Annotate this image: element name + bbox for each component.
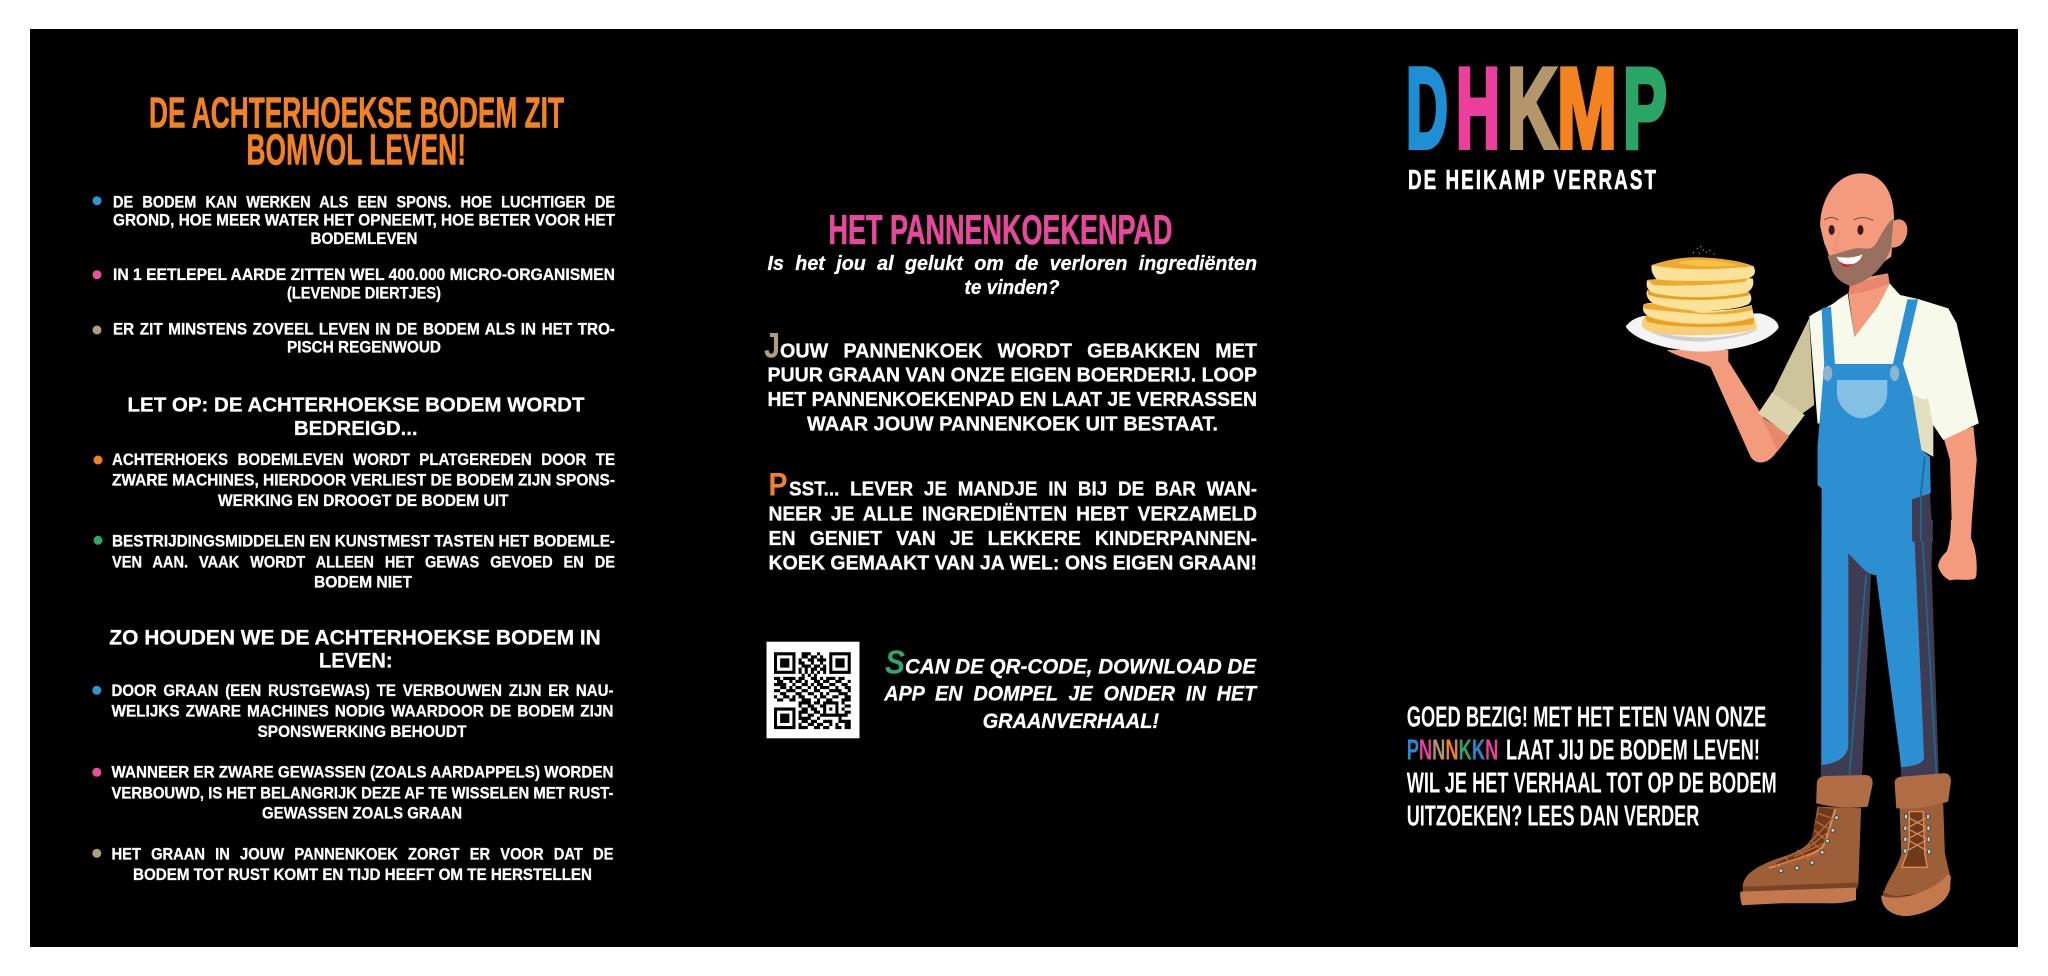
bullet list: threats — [94, 450, 615, 592]
heading: let op: LET OP: DE ACHTERHOEKSE BODEM WORDT — [128, 394, 585, 417]
paragraph: jouw pannenkoek — [764, 326, 1257, 436]
bullet list: threats: BODEM NIET — [314, 573, 413, 592]
ear — [1891, 219, 1907, 248]
neck — [1848, 273, 1890, 337]
heading: let op — [128, 394, 585, 440]
pocket — [1837, 380, 1887, 418]
bullet list: solutions: WELIJKS ZWARE MACHINES NODIG WAARDOOR DE BODEM ZIJN — [112, 701, 614, 720]
shirt — [1809, 283, 1979, 457]
left arm — [1710, 362, 1789, 463]
pancake stack — [1642, 315, 1757, 335]
bullet list: threats: VEN AAN. VAAK WORDT ALLEEN HET GEWAS GEVOED EN DE — [112, 552, 615, 571]
text: scan de qr-code: APP EN DOMPEL JE ONDER IN HET — [883, 682, 1258, 706]
paragraph: jouw pannenkoek: J — [764, 326, 780, 366]
left boot — [1740, 775, 1873, 905]
paragraph: psst: EN GENIET VAN JE LEKKERE KINDERPANNEN- — [768, 527, 1257, 550]
bullet list: solutions: BODEM TOT RUST KOMT EN TIJD HEEFT OM TE HERSTELLEN — [133, 865, 592, 884]
bullet list: facts about soil: IN 1 EETLEPEL AARDE ZITTEN WEL 400.000 MICRO-ORGANISMEN — [113, 266, 615, 284]
bullet list: solutions: VERBOUWD, IS HET BELANGRIJK DEZE AF TE WISSELEN MET RUST- — [112, 783, 614, 802]
plate with pancakes — [1626, 246, 1779, 373]
paragraph: jouw pannenkoek: PUUR GRAAN VAN ONZE EIGEN BOERDERIJ. LOOP — [768, 364, 1257, 387]
text: scan de qr-code: CAN DE QR-CODE, DOWNLOAD DE — [905, 654, 1257, 678]
right arm upper — [1943, 427, 1977, 542]
blue overall legs — [1821, 520, 1924, 767]
text: scan de qr-code: S — [885, 643, 905, 680]
title: de achterhoekse bodem zit bomvol leven: BOMVOL LEVEN! — [246, 126, 466, 174]
back sleeve — [1772, 318, 1814, 423]
text: scan de qr-code — [883, 643, 1258, 733]
powdered sugar — [1693, 246, 1715, 255]
paragraph: psst: NEER JE ALLE INGREDIËNTEN HEBT VERZAMELD — [768, 502, 1257, 525]
overall bib — [1818, 299, 1931, 542]
italic intro question: te vinden? — [964, 277, 1060, 299]
paragraph: jouw pannenkoek: OUW PANNENKOEK WORDT GEBAKKEN MET — [780, 339, 1257, 362]
plate — [1626, 313, 1779, 352]
head — [1820, 173, 1894, 286]
bullet list: facts about soil: (LEVENDE DIERTJES) — [287, 284, 441, 302]
panel: left column about the soil — [92, 88, 615, 884]
paragraph: psst: P — [768, 467, 788, 503]
paragraph: psst: KOEK GEMAAKT VAN JA WEL: ONS EIGEN GRAAN! — [768, 551, 1257, 574]
hand — [1667, 350, 1728, 373]
qr code — [766, 642, 860, 738]
logo: dhkmp de heikamp verrast: DE HEIKAMP VERRAST — [1408, 164, 1658, 195]
right boot — [1881, 773, 1951, 916]
bullet list: facts about soil: ER ZIT MINSTENS ZOVEEL LEVEN IN DE BODEM ALS IN HET TRO- — [113, 320, 615, 338]
bullet list: solutions — [92, 681, 614, 884]
legs and boots — [1740, 520, 1977, 916]
title: de achterhoekse bodem zit bomvol leven: DE ACHTERHOEKSE BODEM ZIT — [149, 88, 564, 138]
mouth — [1837, 254, 1862, 265]
bullet list: facts about soil: BODEMLEVEN — [310, 230, 418, 248]
bullet list: solutions: SPONSWERKING BEHOUDT — [258, 722, 467, 741]
trouser underlayer — [1821, 520, 1939, 777]
bullet list: facts about soil: DE BODEM KAN WERKEN ALS EEN SPONS. HOE LUCHTIGER DE — [113, 193, 615, 211]
heading: het pannenkoekenpad: HET PANNENKOEKENPAD — [828, 206, 1172, 253]
text: goed bezig — [1407, 702, 1777, 833]
paragraph: jouw pannenkoek: WAAR JOUW PANNENKOEK UIT BESTAAT. — [807, 413, 1218, 436]
illustration: bald farmer holding pancakes — [1626, 173, 1979, 916]
bullet list: facts about soil — [92, 193, 615, 357]
bullet list: threats: ACHTERHOEKS BODEMLEVEN WORDT PLATGEREDEN DOOR TE — [112, 450, 615, 469]
logo: dhkmp de heikamp verrast: K — [1507, 46, 1557, 172]
text: goed bezig: GOED BEZIG! MET HET ETEN VAN ONZE — [1407, 702, 1766, 734]
bullet list: solutions: DOOR GRAAN (EEN RUSTGEWAS) TE VERBOUWEN ZIJN ER NAU- — [112, 681, 614, 700]
paragraph: psst: SST... LEVER JE MANDJE IN BIJ DE BAR WAN- — [789, 478, 1257, 501]
text: goed bezig: PNNNKKN — [1407, 734, 1498, 766]
text: goed bezig: LAAT JIJ DE BODEM LEVEN! — [1506, 734, 1760, 766]
text: goed bezig: UITZOEKEN? LEES DAN VERDER — [1407, 801, 1699, 833]
buttons — [1823, 366, 1832, 381]
bullet list: solutions: HET GRAAN IN JOUW PANNENKOEK ZORGT ER VOOR DAT DE — [112, 845, 614, 864]
eyes and brows — [1829, 225, 1835, 235]
trouser hip — [1912, 493, 1933, 542]
bullet list: solutions: GEWASSEN ZOALS GRAAN — [262, 804, 462, 823]
bullet list: threats: BESTRIJDINGSMIDDELEN EN KUNSTMEST TASTEN HET BODEMLE- — [112, 532, 615, 551]
title: de achterhoekse bodem zit bomvol leven — [149, 88, 564, 174]
italic intro question: Is het jou al gelukt om de verloren ingrediënten — [768, 253, 1257, 275]
heading: zo houden we: ZO HOUDEN WE DE ACHTERHOEKSE BODEM IN — [109, 626, 601, 650]
bullet list: facts about soil: PISCH REGENWOUD — [287, 339, 441, 357]
heading: let op: BEDREIGD... — [294, 417, 418, 440]
bullet list: threats: WERKING EN DROOGT DE BODEM UIT — [218, 491, 509, 510]
logo: dhkmp de heikamp verrast: H — [1456, 46, 1500, 172]
bullet list: facts about soil: GROND, HOE MEER WATER HET OPNEEMT, HOE BETER VOOR HET — [113, 212, 615, 230]
logo: dhkmp de heikamp verrast: D — [1406, 46, 1448, 172]
text: scan de qr-code: GRAANVERHAAL! — [983, 709, 1159, 733]
heading: zo houden we — [109, 626, 601, 673]
logo: dhkmp de heikamp verrast: P — [1623, 46, 1667, 172]
paragraph: psst — [768, 467, 1257, 574]
logo: dhkmp de heikamp verrast — [1406, 46, 1667, 195]
beard — [1828, 218, 1894, 286]
right arm lower and fist — [1938, 520, 1977, 580]
bullet list: solutions: WANNEER ER ZWARE GEWASSEN (ZOALS AARDAPPELS) WORDEN — [112, 763, 614, 782]
paragraph: jouw pannenkoek: HET PANNENKOEKENPAD EN LAAT JE VERRASSEN — [768, 388, 1257, 411]
upper body — [1710, 173, 1979, 542]
heading: zo houden we: LEVEN: — [319, 649, 392, 673]
bullet list: threats: ZWARE MACHINES, HIERDOOR VERLIEST DE BODEM ZIJN SPONS- — [112, 471, 615, 490]
italic intro question — [768, 253, 1257, 299]
logo: dhkmp de heikamp verrast: M — [1557, 46, 1617, 172]
text: goed bezig: WIL JE HET VERHAAL TOT OP DE BODEM — [1407, 768, 1777, 800]
panel: middle column pancake trail — [764, 206, 1258, 738]
